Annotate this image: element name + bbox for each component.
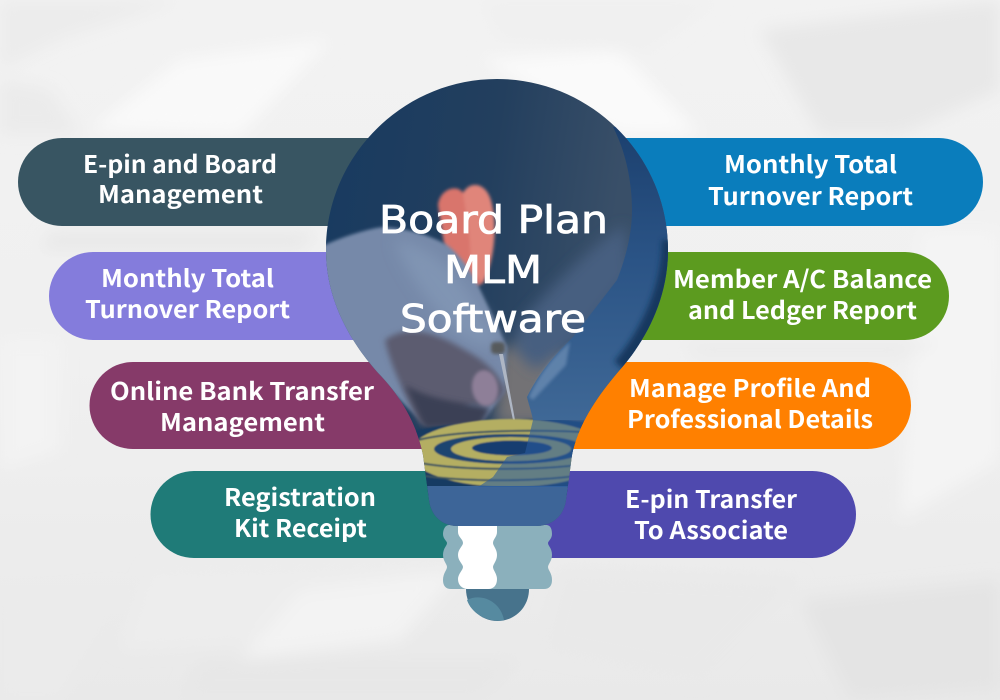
photo: blurred right hand <box>515 225 630 370</box>
photo: dartboard <box>416 418 584 494</box>
pill: E-pin Transfer To Associate: E-pin Transfer <box>625 480 798 515</box>
pill: Registration Kit Receipt: Registration <box>224 478 376 513</box>
photo: tan backdrop <box>495 330 585 425</box>
pill: E-pin Transfer To Associate <box>500 471 856 558</box>
pill: Monthly Total Turnover Report (left) <box>49 252 500 340</box>
pill: Monthly Total Turnover Report (left): Monthly Total <box>101 259 274 294</box>
title: Board Plan MLM Software <box>379 198 608 341</box>
pill: Member A/C Balance and Ledger Report: Member A/C Balance <box>673 260 932 295</box>
pill: E-pin and Board Management <box>18 138 500 226</box>
pill: E-pin and Board Management: E-pin and Board <box>83 145 277 180</box>
photo: dart barrel and needle <box>491 342 515 420</box>
title: Board Plan MLM Software: Board Plan <box>379 198 608 242</box>
pill: Manage Profile And Professional Details: Professional Details <box>627 400 873 435</box>
photo: right edge shade <box>622 240 672 368</box>
pill: E-pin Transfer To Associate: To Associate <box>634 511 788 546</box>
pill: Member A/C Balance and Ledger Report <box>500 252 949 340</box>
photo: blue overlay on board <box>478 420 584 487</box>
icon: light bulb with photo <box>320 70 680 621</box>
photo: lower blue band <box>427 486 568 526</box>
pill: Member A/C Balance and Ledger Report: and Ledger Report <box>688 291 917 326</box>
photo: thumb nail <box>470 368 500 408</box>
photo: blue overlay on right side <box>527 120 680 420</box>
pill: Online Bank Transfer Management: Management <box>160 403 325 438</box>
pill: Registration Kit Receipt <box>150 471 500 558</box>
pill: Manage Profile And Professional Details <box>500 362 911 449</box>
photo: dark under thumb <box>405 385 490 428</box>
photo: left hand <box>320 227 507 425</box>
photo: thumb shaded <box>385 331 505 425</box>
pill: Online Bank Transfer Management <box>90 362 500 449</box>
bulb glass photo <box>320 70 680 530</box>
pill: Online Bank Transfer Management: Online Bank Transfer <box>110 372 375 407</box>
title: Board Plan MLM Software: MLM <box>444 248 542 292</box>
pill: Monthly Total Turnover Report (left): Turnover Report <box>85 290 290 325</box>
photo: dart flights <box>438 185 495 290</box>
pill: Registration Kit Receipt: Kit Receipt <box>234 509 367 544</box>
pill: Manage Profile And Professional Details: Manage Profile And <box>629 369 871 404</box>
bulb tip <box>466 589 529 621</box>
photo: hand lighter finger <box>406 249 504 340</box>
bulb screw base <box>443 525 552 589</box>
photo: overlay highlight strip <box>529 342 570 400</box>
pill: Monthly Total Turnover Report (right): Turnover Report <box>708 177 913 212</box>
title: Board Plan MLM Software: Software <box>400 297 586 341</box>
pill: E-pin and Board Management: Management <box>98 175 263 210</box>
pill: Monthly Total Turnover Report (right): Monthly Total <box>724 145 897 180</box>
pill: Monthly Total Turnover Report (right) <box>500 138 983 226</box>
